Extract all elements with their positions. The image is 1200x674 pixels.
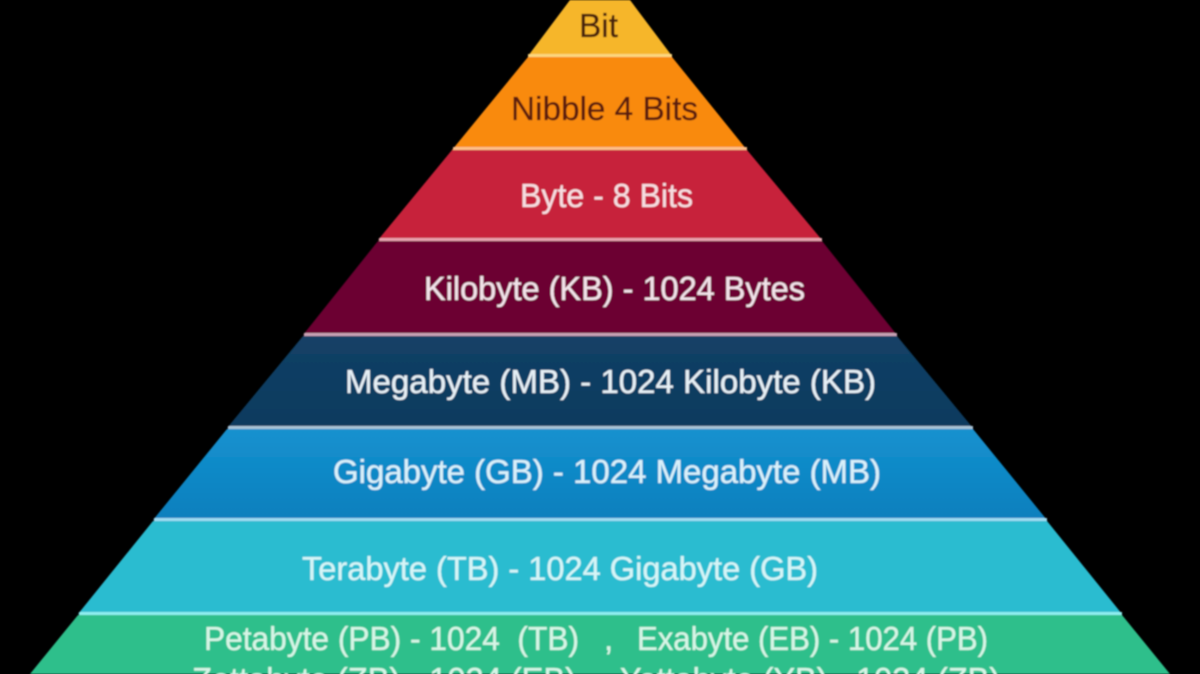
tier: Petabyte and above [30,615,1170,674]
tier: Nibble: Nibble 4 Bits [511,90,698,127]
tier: Terabyte [78,521,1122,615]
tier: Megabyte: Megabyte (MB) - 1024 Kilobyte (KB) [345,363,876,400]
tier: Gigabyte: Gigabyte (GB) - 1024 Megabyte (MB) [333,453,881,490]
tier: Petabyte and above: , [604,620,613,657]
tier: Petabyte and above: Petabyte (PB) - 1024 (TB) [204,620,579,657]
tier: Byte [378,150,822,241]
tier: Nibble [452,57,747,150]
tier: Kilobyte [303,241,897,336]
tier: Kilobyte: Kilobyte (KB) - 1024 Bytes [424,270,805,307]
tier: Gigabyte [153,429,1047,521]
tier: Bit: Bit [579,7,618,44]
tier: Megabyte [227,336,973,429]
tier: Byte: Byte - 8 Bits [520,177,693,214]
tier: Petabyte and above: Exabyte (EB) - 1024 (PB) [637,620,988,657]
tier: Bit [528,0,672,57]
tier: Terabyte: Terabyte (TB) - 1024 Gigabyte (GB) [302,550,818,587]
